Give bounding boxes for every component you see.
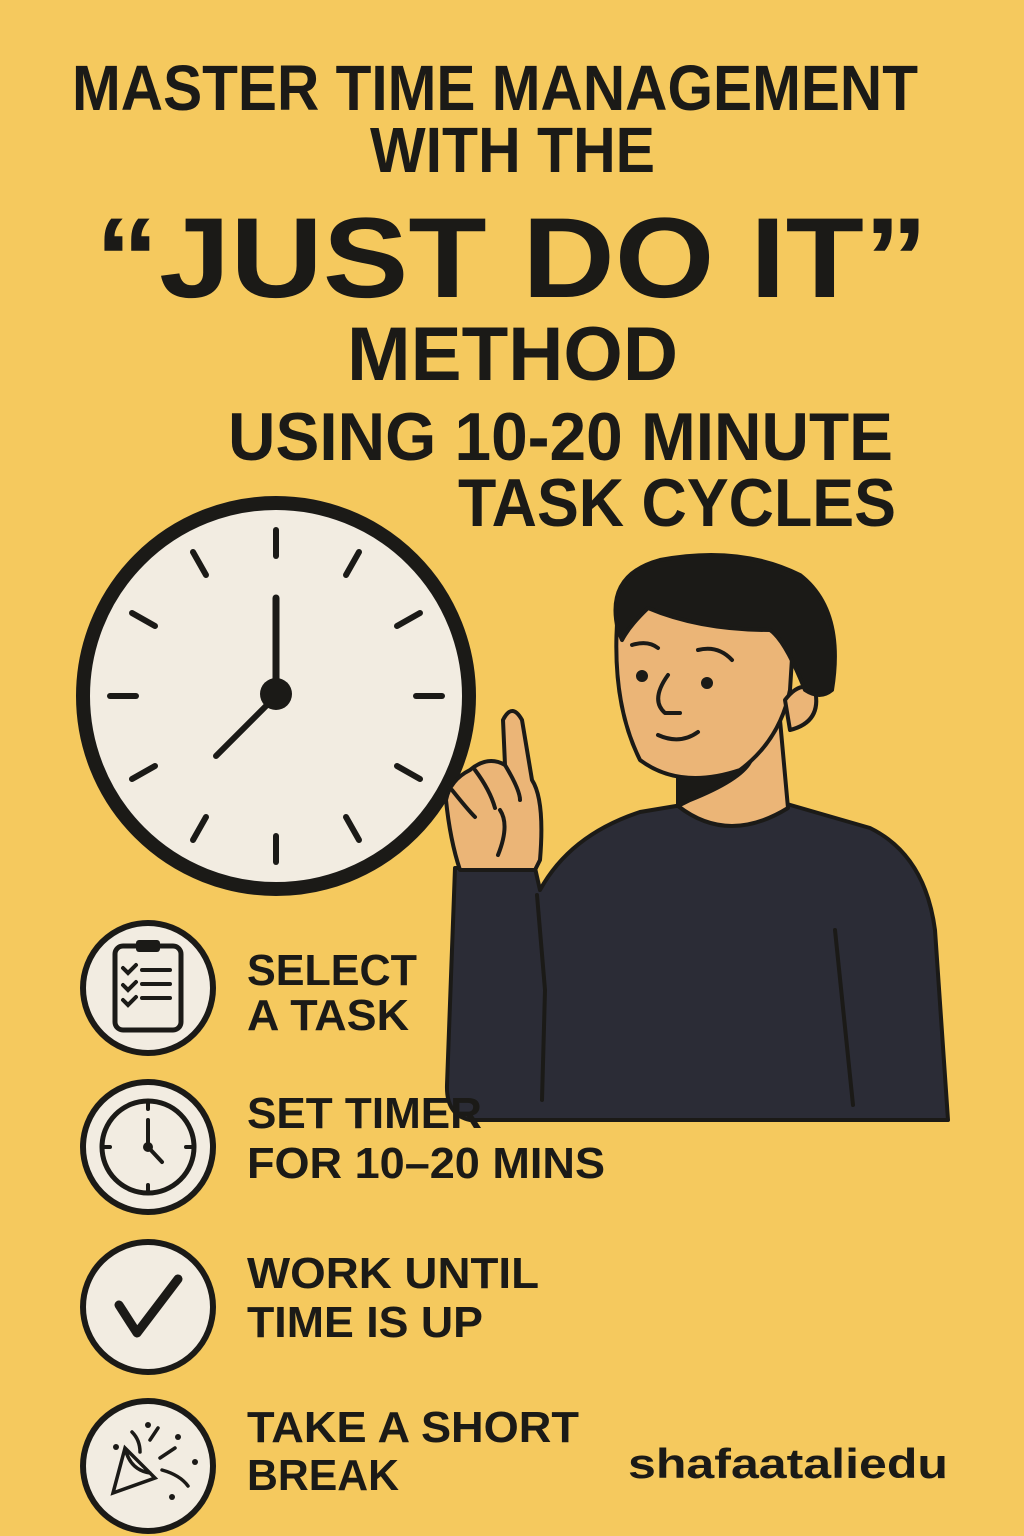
icon: wall clock [83,503,469,889]
subtitle: TASK CYCLES [458,465,896,541]
hair [616,555,835,695]
subtitle [228,399,896,541]
step 4: take a short break: BREAK [247,1451,399,1500]
step list [83,923,605,1531]
ear [785,687,816,730]
step 3: work until time is up: WORK UNTIL [247,1249,539,1298]
subtitle: USING 10-20 MINUTE [228,399,893,475]
face [616,583,795,778]
eyes brows mouth [632,643,732,739]
body with sweater [447,802,948,1120]
title: METHOD [347,312,678,397]
hand [446,711,541,870]
step 1: select a task [83,923,417,1053]
step 3: work until time is up: TIME IS UP [247,1298,483,1347]
step 2: set timer [83,1082,605,1212]
title [72,52,928,397]
title: “JUST DO IT” [95,195,928,322]
step 4: take a short break [83,1401,579,1531]
step 3: work until time is up [83,1242,539,1372]
title: MASTER TIME MANAGEMENT [72,52,918,124]
step 1: select a task: SELECT [247,946,417,995]
title: WITH THE [370,114,655,186]
step 4: take a short break: TAKE A SHORT [247,1403,579,1452]
neck [678,720,788,826]
watermark: shafaataliedu [628,1440,948,1487]
illustration: man pointing [446,555,948,1120]
step 2: set timer: SET TIMER [247,1089,482,1138]
step 2: set timer: FOR 10–20 MINS [247,1139,605,1188]
step 1: select a task: A TASK [247,991,409,1040]
